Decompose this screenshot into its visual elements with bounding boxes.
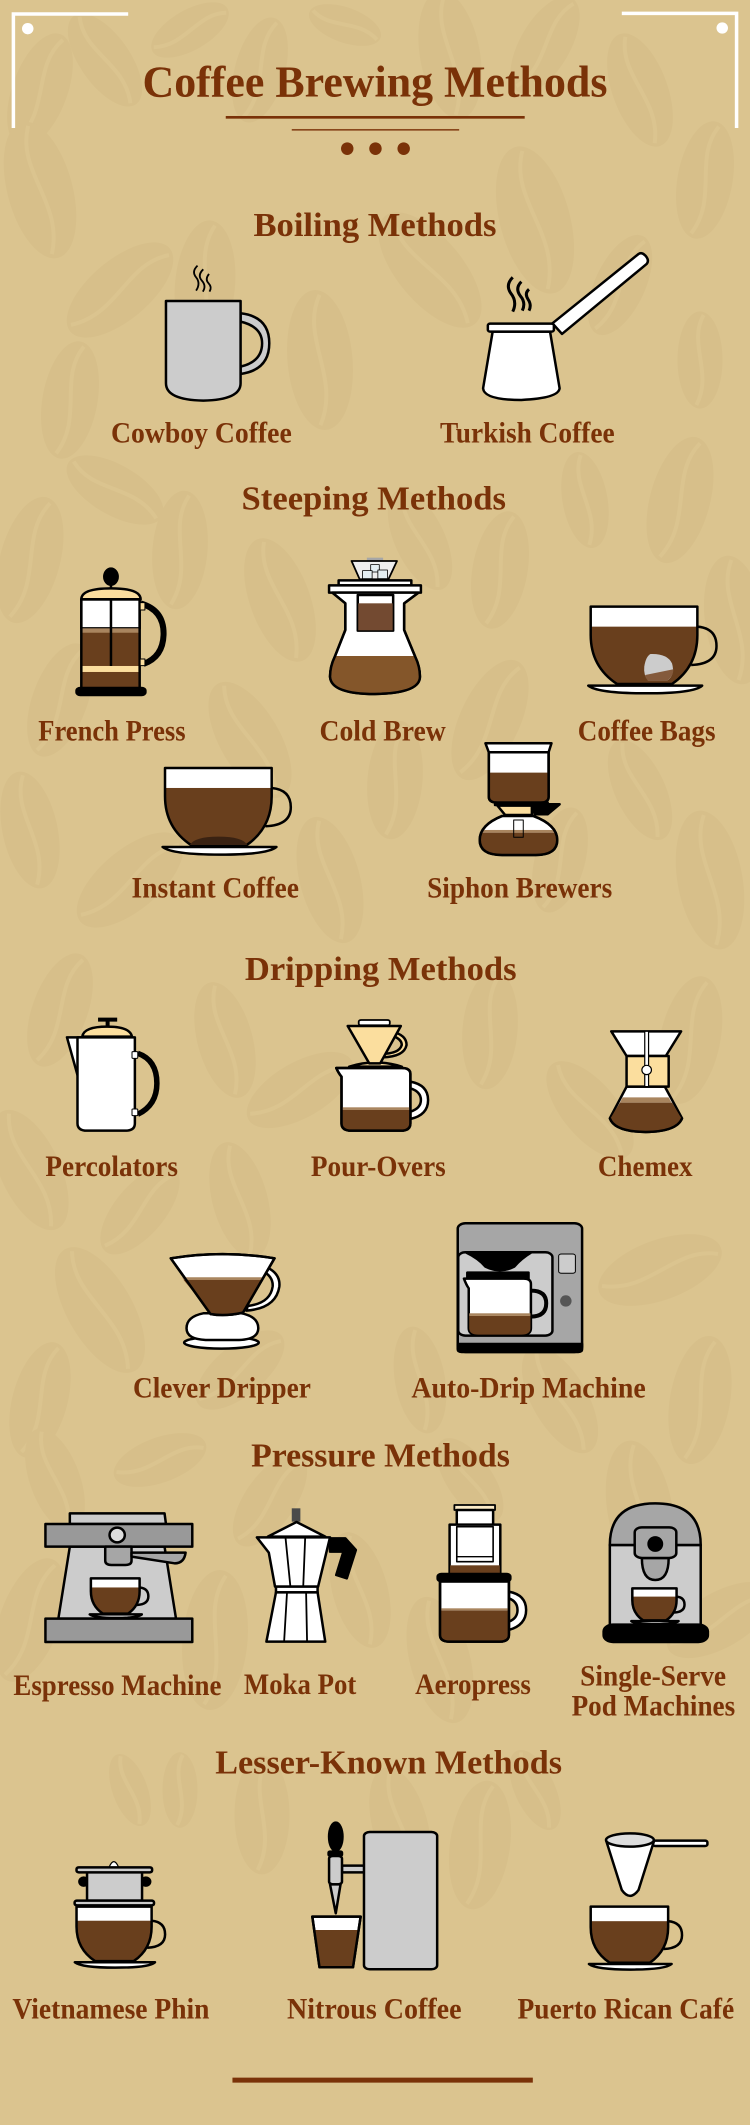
icon: aeropress (438, 1505, 526, 1642)
label: percolators: Percolators (45, 1150, 178, 1182)
icon: turkish coffee pot (483, 253, 648, 400)
icon: auto-drip machine (458, 1223, 582, 1352)
corner frame: left (13, 14, 128, 128)
icon: siphon brewer (480, 743, 560, 855)
icon: vietnamese phin (75, 1862, 165, 1968)
label: french press: French Press (38, 715, 186, 747)
title ornament (226, 116, 525, 155)
panel: dripping methods (45, 950, 693, 1404)
icon: puerto rican cafe (589, 1833, 707, 1970)
label: aeropress: Aeropress (415, 1668, 531, 1700)
icon: clever dripper (171, 1254, 279, 1349)
label: turkish coffee: Turkish Coffee (440, 417, 615, 449)
icon: single-serve pod machine (604, 1503, 708, 1642)
icon: pour-over (336, 1020, 428, 1131)
label: vietnamese phin: Vietnamese Phin (12, 1992, 209, 2025)
corner frame: right (622, 13, 737, 128)
panel: steeping methods (38, 479, 716, 904)
label: cold brew: Cold Brew (320, 715, 446, 747)
icon: espresso machine (45, 1513, 192, 1642)
label: clever dripper: Clever Dripper (133, 1372, 311, 1404)
icon: cold brew (329, 558, 421, 694)
panel: pressure methods (13, 1437, 735, 1722)
icon: nitrous coffee (312, 1823, 437, 1969)
icon: instant coffee cup (163, 768, 291, 855)
label: espresso machine: Espresso Machine (13, 1669, 221, 1701)
heading: dripping methods: Dripping Methods (245, 950, 517, 987)
label: moka pot: Moka Pot (244, 1668, 356, 1700)
label: single-serve pod machines (572, 1660, 735, 1722)
label: chemex: Chemex (598, 1150, 693, 1182)
title banner (13, 13, 737, 155)
icon: cowboy coffee mug (166, 266, 269, 401)
icon: chemex (610, 1031, 682, 1132)
label: nitrous coffee: Nitrous Coffee (287, 1992, 462, 2025)
icon: coffee bags cup (588, 607, 716, 693)
icon: percolator (67, 1020, 157, 1131)
heading: lesser-known methods: Lesser-Known Methods (215, 1743, 562, 1781)
heading: steeping methods: Steeping Methods (242, 479, 506, 517)
panel: boiling methods (111, 206, 648, 449)
heading: boiling methods: Boiling Methods (253, 206, 496, 243)
panel: lesser-known methods (12, 1743, 734, 2083)
footer rule (232, 2078, 533, 2083)
label: instant coffee: Instant Coffee (132, 871, 299, 904)
icon: french press (77, 569, 164, 695)
label: cowboy coffee: Cowboy Coffee (111, 417, 292, 449)
label: pour-overs: Pour-Overs (311, 1150, 446, 1182)
heading: pressure methods: Pressure Methods (251, 1437, 510, 1474)
label: siphon brewers: Siphon Brewers (427, 871, 612, 904)
icon: moka pot (257, 1508, 356, 1642)
